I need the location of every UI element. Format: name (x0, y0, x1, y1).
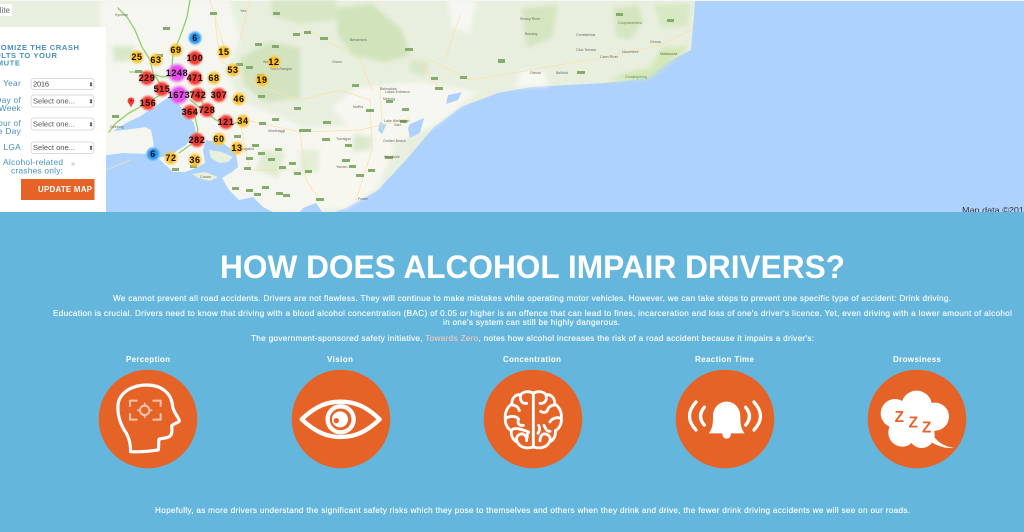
place names: Lake Wellington (384, 119, 410, 123)
crash cluster markers: 53 (227, 65, 239, 75)
crash cluster markers: 60 (213, 134, 225, 144)
land colour patches (100, 0, 690, 212)
map of south-eastern Victoria (0, 0, 1024, 215)
place names: Lakes Entrance (385, 90, 410, 94)
icon: brain (505, 392, 561, 448)
year filter: 2016 (33, 80, 49, 88)
year filter: ⬍ (88, 82, 94, 88)
intro text: in one's system can still be highly dangerous. (443, 318, 620, 327)
place names: Yarram (336, 165, 348, 169)
crash cluster markers: 19 (256, 75, 268, 85)
place names: Traralgon (336, 137, 351, 141)
alcohol-related checkbox (3, 157, 74, 176)
panel: customize crash results (0, 27, 106, 212)
impairment: reaction time (676, 355, 774, 468)
place names: Mallacoota (660, 52, 677, 56)
impairment: reaction time: Reaction Time (695, 355, 755, 364)
LGA filter (3, 142, 94, 154)
icon: bell with sound waves (689, 402, 760, 439)
icon: sleep thought bubble: Z (895, 409, 904, 426)
crash cluster markers: 69 (170, 45, 182, 55)
place names: Bonang (525, 32, 537, 36)
place names: Foster (358, 197, 369, 201)
place names: Bairnsdale (380, 87, 397, 91)
crash cluster markers: 68 (208, 73, 220, 83)
place names: Wonthaggi (268, 129, 285, 133)
panel: how does alcohol impair drivers (0, 212, 1024, 532)
place names: Geelong (110, 125, 124, 129)
crash cluster markers: 515 (154, 84, 170, 94)
crash cluster markers: 742 (190, 90, 206, 100)
title: HOW DOES ALCOHOL IMPAIR DRIVERS? (220, 249, 845, 285)
year filter (3, 78, 94, 90)
place names: Metung (383, 97, 395, 101)
LGA filter: Select one... (33, 143, 75, 152)
intro text: Education is crucial. Drivers need to know that driving with a blood alcohol concentration (BAC) of 0.05 or higher is an offence that can lead to fines, incarceration and loss of one's driver's licence. Yet, even driving with a lower amount of alcohol (53, 309, 1012, 318)
year filter: Year (3, 78, 21, 88)
crash cluster markers: 12 (268, 57, 280, 67)
icon: sleep thought bubble: Z (909, 414, 918, 431)
crash cluster markers: 34 (237, 116, 249, 126)
crash cluster markers: 36 (189, 155, 201, 165)
place names: Leongatha (237, 147, 254, 151)
LGA filter: ⬍ (88, 145, 94, 152)
alcohol-related checkbox: crashes only: (11, 166, 63, 176)
place names: Coopracambra (618, 21, 642, 25)
crash cluster markers: 471 (187, 73, 203, 83)
intro text: We cannot prevent all road accidents. Drivers are not flawless. They will continue to make mistakes while operating motor vehicles. However, we can take steps to prevent one specific type of accident: Drink driving. (113, 294, 951, 303)
update map button (21, 179, 94, 200)
place names: Yarra Ranges (270, 67, 292, 71)
hour of day filter: Select one... (33, 120, 75, 128)
hour of day filter: ⬍ (88, 122, 94, 128)
place names (110, 9, 677, 201)
crash cluster markers: 307 (211, 90, 227, 100)
crash cluster markers: 25 (131, 52, 143, 62)
crash cluster markers: 6 (192, 33, 198, 43)
icon: head with target (118, 385, 179, 452)
lakes and small inlets (300, 92, 462, 212)
day of week filter (0, 95, 94, 113)
crash cluster markers: 72 (165, 153, 177, 163)
impairment: drowsiness: Drowsiness (893, 355, 942, 364)
impairment: concentration: Concentration (503, 355, 561, 364)
crash cluster markers: 63 (150, 55, 162, 65)
crash cluster markers: 13 (231, 143, 243, 153)
impairment: vision: Vision (327, 355, 353, 364)
place names: Club Terrace (576, 48, 596, 52)
place names: Cowes (200, 175, 211, 179)
intro text (53, 294, 1012, 343)
icon: sleep thought bubble: Z (922, 420, 931, 437)
crash cluster markers: 6 (150, 149, 156, 159)
roads (106, 0, 691, 200)
impairment: perception: Perception (126, 355, 170, 364)
place names: Genoa (650, 40, 661, 44)
sea, Port Phillip Bay and Western Port (100, 97, 273, 212)
land mass (0, 1, 695, 212)
impairment: drowsiness (868, 355, 966, 468)
alcohol-related checkbox: Alcohol-related (3, 157, 63, 167)
place names: Croajingolong (625, 75, 647, 79)
crash cluster markers: 1248 (166, 68, 188, 78)
place names: Noorinbee (622, 50, 639, 54)
crash cluster markers: 229 (139, 73, 155, 83)
intro text: The government-sponsored safety initiative, Towards Zero, notes how alcohol increases the risk of a road accident because it impairs a driver's: (251, 334, 814, 343)
crash cluster markers: 15 (218, 47, 230, 57)
crash cluster markers: 156 (140, 98, 156, 108)
Phillip and French islands (192, 150, 233, 181)
place names: Sale (394, 123, 401, 127)
place names: Woodside (384, 155, 400, 159)
update map button: UPDATE MAP (38, 185, 93, 194)
place names: Combienbar (576, 33, 596, 37)
crash cluster markers: 121 (218, 117, 234, 127)
place names: Kyneton (115, 13, 128, 17)
place names: Yea (240, 9, 246, 13)
crash cluster markers: 46 (233, 94, 245, 104)
highway shields (112, 12, 674, 201)
panel heading (0, 43, 80, 68)
crash cluster markers (129, 30, 282, 168)
place names: Snowy River (520, 17, 541, 21)
crash cluster markers: 100 (187, 53, 203, 63)
icon: sleep thought bubble (881, 391, 954, 448)
place names: Maffra (353, 105, 363, 109)
impairment: perception (99, 355, 197, 468)
red location pin (128, 98, 134, 108)
crash cluster markers: 1673 (168, 90, 190, 100)
impairment: vision (292, 355, 390, 468)
LGA filter: LGA (3, 142, 21, 152)
crash cluster markers: 364 (182, 107, 198, 117)
place names: Orbost (530, 71, 541, 75)
hour of day filter (0, 118, 94, 136)
place names: Omeo (332, 60, 342, 64)
day of week filter: Select one... (33, 96, 75, 106)
place names: Benambra (350, 38, 367, 42)
crash cluster markers: 282 (189, 135, 205, 145)
place names: Warburton (263, 60, 280, 64)
place names: Cann River (600, 55, 619, 59)
place names: Golden Beach (383, 139, 406, 143)
place names: Bellbird (556, 71, 568, 75)
impairment: concentration (484, 355, 582, 468)
closing text: Hopefully, as more drivers understand the significant safety risks which they pose to themselves and others when they drink and drive, the fewer drink driving accidents we will see on our roads. (155, 506, 910, 515)
map attribution: Map data ©2017 (962, 205, 1024, 215)
map type tab (0, 4, 12, 16)
crash cluster markers: 728 (199, 105, 215, 115)
day of week filter: ⬍ (88, 98, 94, 106)
icon: eye (302, 402, 380, 437)
